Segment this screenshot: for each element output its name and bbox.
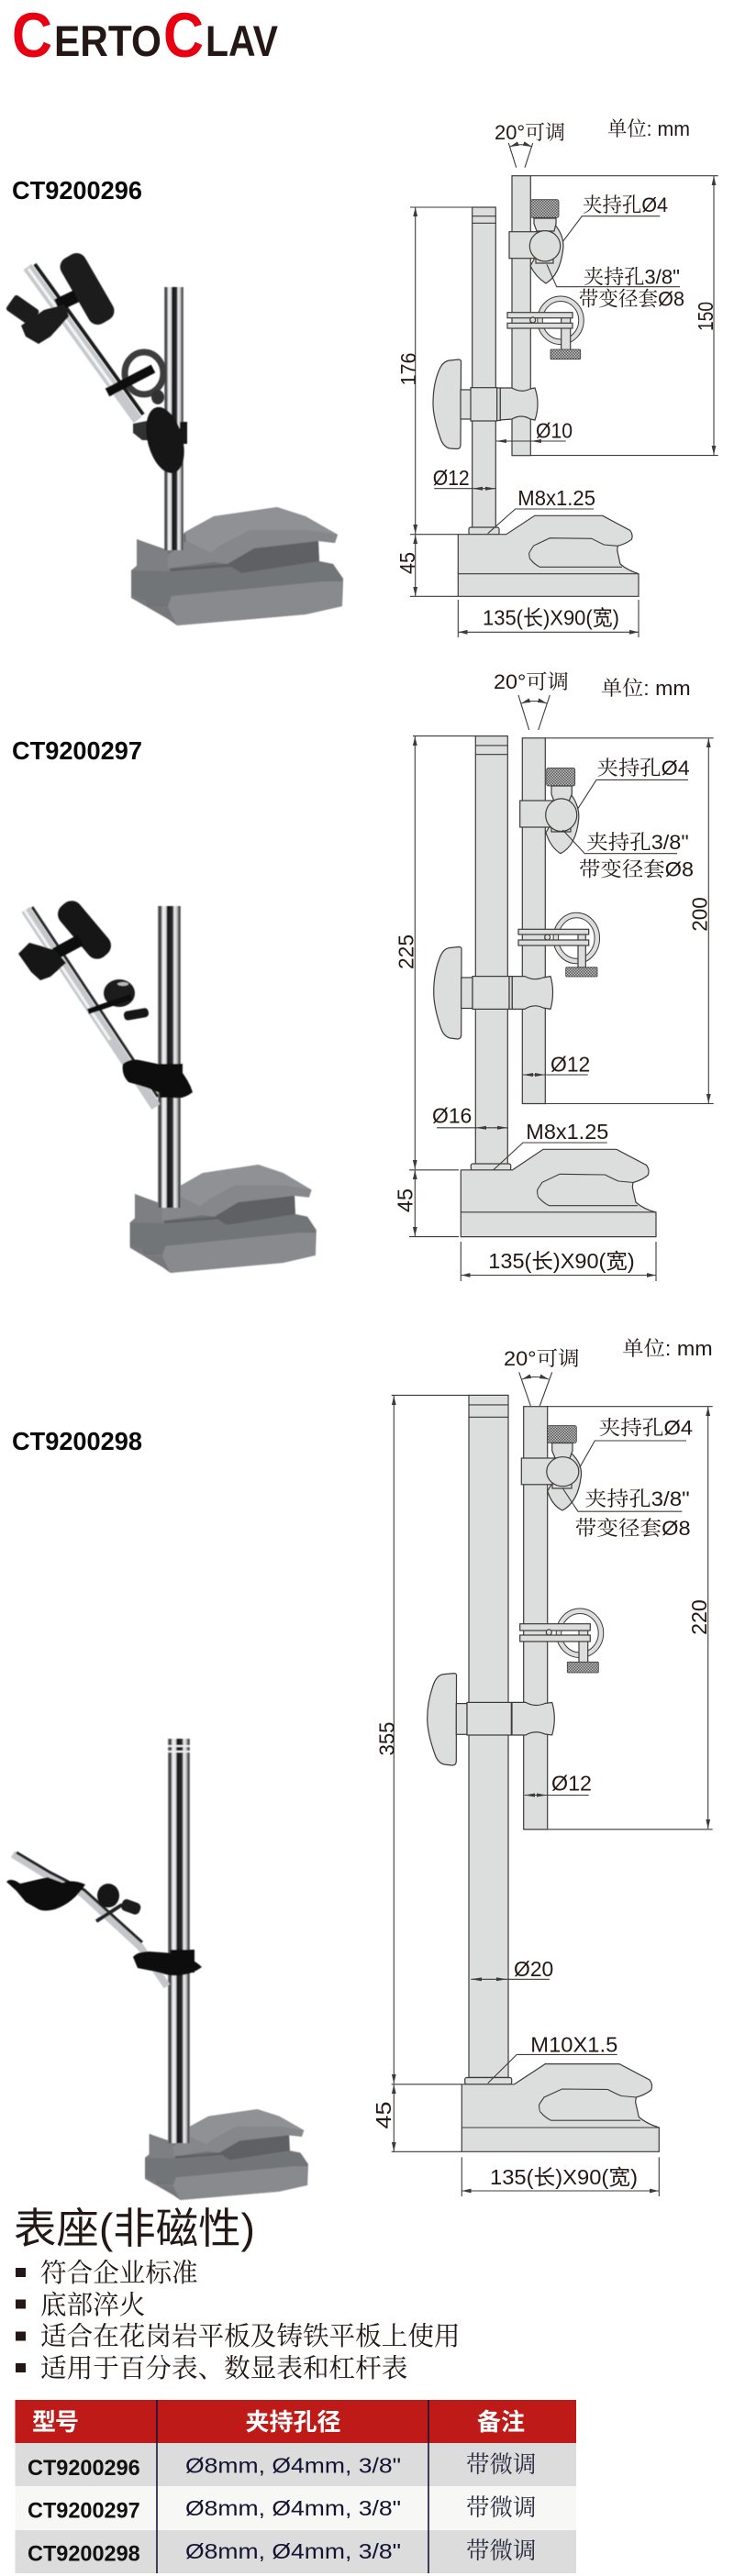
leader: clamp hole 4: [578, 779, 688, 809]
swivel arm: [13, 1852, 167, 1986]
model label: CT9200296: CT9200296: [12, 176, 142, 205]
leader: clamp hole 3/8: [562, 1487, 682, 1511]
label: diameter 12: Ø12: [550, 1053, 590, 1077]
bullet 1: 符合企业标准: [40, 2259, 198, 2288]
dimension drawing: CT9200298: [372, 1337, 713, 2196]
label: 45: 45: [393, 1188, 417, 1212]
ring and lower clamp: [107, 352, 164, 404]
unit label: 单位: mm: [607, 117, 690, 140]
dimension lines: [392, 1395, 713, 2196]
base: [458, 515, 639, 596]
first black clamp and knob: [6, 1877, 85, 1911]
lever: [133, 1950, 202, 1975]
label: diameter 12: Ø12: [551, 1772, 592, 1796]
logo: CertoClav: C: [12, 0, 52, 71]
label: reducing sleeve: 带变径套Ø8: [575, 1517, 691, 1540]
label: base size: 135(长)X90(宽): [483, 606, 619, 630]
right post: [524, 1407, 548, 1830]
table header: 型号: [32, 2408, 79, 2436]
label: thread M10X1.5: M10X1.5: [530, 2032, 617, 2056]
leader: clamp hole 4: [563, 216, 660, 241]
base: [461, 1149, 656, 1237]
row CT9200298: Ø8mm, Ø4mm, 3/8": [185, 2539, 401, 2563]
row CT9200298: 带微调: [466, 2533, 537, 2566]
upper clamp: [509, 200, 563, 283]
vertical rod: [158, 906, 181, 1208]
label: diameter 12: [433, 466, 495, 491]
label: clamp hole 3/8: 夹持孔3/8": [584, 265, 680, 288]
label: 225: 225: [395, 934, 418, 969]
leader: clamp hole 3/8: [547, 264, 680, 287]
angle label: 20°可调: [495, 121, 565, 144]
label: 45: 45: [395, 552, 419, 574]
row CT9200297: 带微调: [466, 2490, 537, 2523]
unit label: 单位: mm: [622, 1337, 713, 1360]
dimension drawing: CT9200297: [393, 670, 714, 1281]
lever: [133, 403, 191, 478]
bullet 4: 适用于百分表、数显表和杠杆表: [40, 2354, 407, 2383]
knob and cross clamp: [428, 1674, 554, 1765]
label: thread M8x1.25: M8x1.25: [526, 1120, 608, 1144]
table header: 夹持孔径: [246, 2408, 341, 2436]
label: diameter 12: [523, 1053, 590, 1077]
leader: clamp hole 3/8: [562, 830, 677, 854]
right post: [512, 176, 530, 456]
lever: [123, 1060, 193, 1098]
cast base: [131, 507, 343, 625]
bullet 2: 底部淬火: [40, 2291, 145, 2320]
main column: [469, 1395, 508, 2077]
label: diameter 20: Ø20: [514, 1957, 553, 1981]
specification table: [15, 2400, 576, 2573]
model label: CT9200298: CT9200298: [12, 1427, 142, 1455]
lower clamp and ring: [518, 915, 597, 977]
label: diameter 16: Ø16: [432, 1104, 472, 1128]
row CT9200298: [15, 2530, 576, 2573]
dimension lines: [410, 176, 718, 637]
lower clamp and ring: [507, 299, 582, 359]
row CT9200296: CT9200296: [28, 2456, 140, 2481]
main column: [475, 736, 507, 1165]
label: clamp hole 4: 夹持孔Ø4: [583, 193, 668, 216]
angle marker: [518, 695, 550, 730]
label: clamp hole 3/8: 夹持孔3/8": [584, 1487, 690, 1510]
row CT9200297: CT9200297: [28, 2499, 140, 2524]
bullet 3: 适合在花岗岩平板及铸铁平板上使用: [40, 2322, 461, 2351]
label: clamp hole 3/8: 夹持孔3/8": [586, 831, 689, 854]
angle label: 20°可调: [504, 1347, 580, 1370]
logo: CertoClav: [12, 0, 279, 71]
heading: 表座(非磁性): [14, 2205, 255, 2252]
label: diameter 20: [471, 1957, 553, 1981]
lower clamp and ring: [520, 1611, 601, 1673]
row CT9200296: [15, 2443, 576, 2486]
logo: CertoClav: LAV: [206, 17, 279, 65]
label: thread M8x1.25: [494, 1120, 608, 1170]
label: 220: 220: [687, 1599, 711, 1635]
feature list: [16, 2259, 461, 2383]
dimension lines: [409, 736, 714, 1281]
cast base: [145, 2109, 308, 2200]
vertical rod: [164, 287, 184, 550]
base: [462, 2064, 659, 2151]
label: diameter 12: Ø12: [433, 466, 470, 490]
knob and cross clamp: [433, 359, 538, 449]
label: diameter 10: Ø10: [536, 418, 573, 442]
angle label: 20°可调: [494, 670, 569, 693]
logo: CertoClav: ERTO: [54, 17, 161, 65]
label: thread M8x1.25: [488, 486, 595, 534]
logo: CertoClav: C: [163, 0, 204, 71]
label: 355: 355: [374, 1722, 398, 1755]
unit label: 单位: mm: [601, 677, 691, 700]
swivel arm: [28, 264, 143, 420]
ring and lower clamp: [88, 979, 150, 1021]
label: diameter 10: [495, 418, 573, 443]
black knob and clamp: [6, 249, 117, 344]
label: 45: 45: [372, 2101, 395, 2129]
photo: CT9200297 dial stand: [18, 896, 317, 1273]
knob and cross clamp: [434, 946, 552, 1039]
model label: CT9200297: CT9200297: [12, 736, 142, 765]
label: diameter 16: [432, 1104, 507, 1130]
label: clamp hole 4: 夹持孔Ø4: [597, 757, 690, 779]
label: base size: 135(长)X90(宽): [490, 2165, 638, 2189]
row CT9200298: CT9200298: [28, 2542, 140, 2567]
ring and lower clamp: [96, 1884, 142, 1921]
label: 150: 150: [694, 302, 717, 331]
table header: [15, 2400, 576, 2443]
label: clamp hole 4: 夹持孔Ø4: [599, 1416, 693, 1439]
label: 176: 176: [396, 352, 420, 385]
leader: clamp hole 4: [580, 1441, 686, 1467]
row CT9200296: 带微调: [466, 2447, 537, 2480]
right post: [522, 738, 545, 1104]
label: thread M10X1.5: [488, 2032, 617, 2084]
label: diameter 12: [525, 1772, 592, 1797]
upper clamp: [521, 1425, 581, 1510]
label: thread M8x1.25: M8x1.25: [517, 486, 595, 510]
table header: 备注: [477, 2408, 525, 2436]
photo: CT9200296 dial stand: [6, 249, 343, 625]
upper clamp: [520, 768, 579, 854]
dimension drawing: CT9200296: [395, 117, 718, 637]
swivel arm: [25, 907, 158, 1107]
row CT9200297: Ø8mm, Ø4mm, 3/8": [185, 2496, 401, 2520]
angle marker: [519, 1372, 552, 1406]
label: base size: 135(长)X90(宽): [488, 1249, 635, 1273]
label: reducing sleeve: 带变径套Ø8: [579, 287, 684, 310]
label: reducing sleeve: 带变径套Ø8: [579, 858, 694, 881]
cast base: [130, 1165, 317, 1273]
row CT9200297: [15, 2486, 576, 2530]
vertical rod: [168, 1739, 190, 2143]
row CT9200296: Ø8mm, Ø4mm, 3/8": [185, 2454, 401, 2478]
label: 200: 200: [688, 897, 712, 932]
main column: [473, 207, 495, 528]
angle marker: [508, 143, 533, 168]
black knob and clamp: [18, 896, 116, 980]
photo: CT9200298 dial stand: [6, 1739, 308, 2200]
